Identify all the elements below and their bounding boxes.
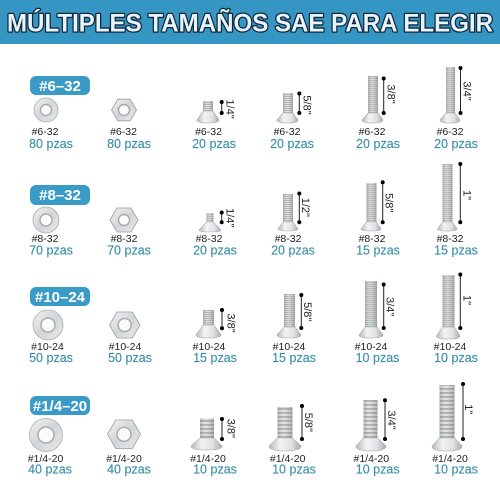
screw 1/4 inch #6-32: 20 pzas: [192, 137, 236, 151]
screw 1/2 inch #8-32: 1/2": [299, 198, 311, 217]
washer #1/4-20: [28, 418, 72, 476]
screw 1/4 inch #8-32: 20 pzas: [193, 244, 237, 258]
title banner: [0, 0, 500, 44]
screw 3/4 inch #6-32: 20 pzas: [434, 137, 478, 151]
screw 3/4 inch #1/4-20: #1/4-20: [353, 453, 389, 465]
screw 5/8 inch #8-32: #8-32: [359, 233, 386, 245]
screw 3/8 inch #1/4-20: [190, 417, 237, 476]
washer #8-32: [29, 207, 73, 258]
screw 3/4 inch #6-32: [434, 66, 478, 151]
screw 1/4 inch #6-32: 1/4": [224, 99, 236, 119]
screw 3/4 inch #10-24: #10-24: [355, 341, 388, 353]
screw 3/4 inch #6-32: #6-32: [437, 126, 464, 138]
screw 5/8 inch #1/4-20: 5/8": [302, 413, 314, 432]
screw 5/8 inch #8-32: 5/8": [382, 193, 394, 212]
screw 3/8 inch #10-24: #10-24: [193, 341, 226, 353]
size badge #8-32: #8–32: [39, 187, 81, 204]
screw 1 inch #1/4-20: 10 pzas: [434, 462, 478, 476]
row: #1/4-20: [28, 382, 478, 476]
nut #10-24: [108, 312, 152, 365]
screw 1/2 inch #8-32: #8-32: [275, 233, 302, 245]
screw 1 inch #10-24: 1": [460, 295, 472, 305]
nut #1/4-20: [106, 420, 151, 476]
screw 1/4 inch #6-32: [192, 99, 236, 151]
screw 3/8 inch #10-24: [193, 308, 237, 365]
screw 3/8 inch #6-32: [356, 76, 400, 151]
size badge #8-32: [30, 185, 90, 205]
size badge #6-32: #6–32: [39, 78, 81, 95]
screw 1/2 inch #8-32: [271, 192, 315, 258]
screw 5/8 inch #1/4-20: [269, 404, 316, 476]
screw 5/8 inch #10-24: [272, 293, 316, 365]
size badge #10-24: #10–24: [35, 289, 86, 306]
size badge #1/4-20: #1/4–20: [33, 398, 87, 415]
screw 3/8 inch #1/4-20: 10 pzas: [193, 462, 237, 476]
screw 5/8 inch #6-32: 5/8": [300, 95, 312, 115]
screw 3/8 inch #10-24: 3/8": [224, 313, 236, 333]
screw 3/8 inch #6-32: 3/8": [384, 84, 396, 104]
nut #8-32: #8-32: [111, 233, 138, 245]
screw 1 inch #1/4-20: [432, 382, 478, 476]
screw 3/4 inch #1/4-20: 3/4": [385, 410, 397, 430]
screw 5/8 inch #1/4-20: #1/4-20: [270, 453, 306, 465]
size badge #6-32: [30, 76, 90, 95]
screw 1 inch #10-24: 10 pzas: [434, 351, 478, 365]
nut #10-24: 50 pzas: [108, 351, 152, 365]
screw 1/4 inch #8-32: [193, 208, 237, 258]
screw 3/8 inch #10-24: 15 pzas: [193, 351, 237, 365]
nut #6-32: [107, 99, 151, 151]
nut #1/4-20: #1/4-20: [106, 453, 142, 465]
screw 1/4 inch #8-32: #8-32: [196, 233, 223, 245]
screw 3/4 inch #10-24: 3/4": [384, 297, 396, 316]
nut #6-32: 80 pzas: [107, 137, 151, 151]
screw 1 inch #10-24: [434, 272, 478, 365]
screw 5/8 inch #10-24: 5/8": [301, 302, 313, 321]
screw 5/8 inch #6-32: [270, 92, 314, 151]
screw 1/4 inch #8-32: 1/4": [224, 208, 236, 227]
nut #10-24: #10-24: [109, 341, 142, 353]
washer #8-32: 70 pzas: [29, 244, 73, 258]
nut #8-32: [107, 208, 151, 258]
washer #6-32: 80 pzas: [29, 137, 73, 151]
nut #8-32: 70 pzas: [107, 244, 151, 258]
screw 3/8 inch #6-32: 20 pzas: [356, 137, 400, 151]
washer #6-32: [29, 98, 73, 151]
title: MÚLTIPLES TAMAÑOS SAE PARA ELEGIR: [7, 8, 493, 38]
screw 3/4 inch #6-32: 3/4": [460, 81, 472, 101]
screw 1 inch #1/4-20: 1": [462, 404, 474, 414]
washer #10-24: [29, 310, 73, 365]
screw 3/4 inch #1/4-20: 10 pzas: [356, 462, 400, 476]
screw 1 inch #8-32: #8-32: [437, 233, 464, 245]
screw 5/8 inch #6-32: 20 pzas: [270, 137, 314, 151]
screw 1/4 inch #6-32: #6-32: [195, 126, 222, 138]
washer #1/4-20: #1/4-20: [28, 453, 63, 465]
screw 3/8 inch #1/4-20: #1/4-20: [190, 453, 226, 465]
nut #6-32: #6-32: [110, 126, 137, 138]
screw 1/2 inch #8-32: 20 pzas: [271, 244, 315, 258]
washer #10-24: #10-24: [31, 341, 64, 353]
row: #10-24: [29, 272, 478, 365]
screw 1 inch #10-24: #10-24: [434, 341, 467, 353]
screw 5/8 inch #1/4-20: 10 pzas: [272, 462, 316, 476]
screw 5/8 inch #8-32: 15 pzas: [356, 244, 400, 258]
nut #1/4-20: 40 pzas: [107, 462, 151, 476]
screw 1 inch #8-32: 1": [460, 190, 472, 200]
screw 3/4 inch #10-24: [355, 281, 399, 365]
screw 5/8 inch #10-24: 15 pzas: [272, 351, 316, 365]
screw 5/8 inch #8-32: [356, 180, 400, 258]
screw 3/8 inch #1/4-20: 3/8": [224, 419, 236, 438]
washer #1/4-20: 40 pzas: [28, 462, 72, 476]
row: #6-32: [29, 66, 478, 151]
screw 1 inch #1/4-20: #1/4-20: [432, 453, 468, 465]
screw 3/4 inch #1/4-20: [353, 398, 400, 476]
washer #6-32: #6-32: [32, 126, 59, 138]
screw 5/8 inch #10-24: #10-24: [273, 341, 306, 353]
screw 1 inch #8-32: [434, 162, 478, 258]
washer #8-32: #8-32: [32, 233, 59, 245]
screw 3/4 inch #10-24: 10 pzas: [356, 351, 399, 365]
screw 1 inch #8-32: 15 pzas: [434, 244, 478, 258]
screw 5/8 inch #6-32: #6-32: [274, 126, 301, 138]
washer #10-24: 50 pzas: [29, 351, 73, 365]
screw 3/8 inch #6-32: #6-32: [359, 126, 386, 138]
row: #8-32: [29, 162, 478, 258]
